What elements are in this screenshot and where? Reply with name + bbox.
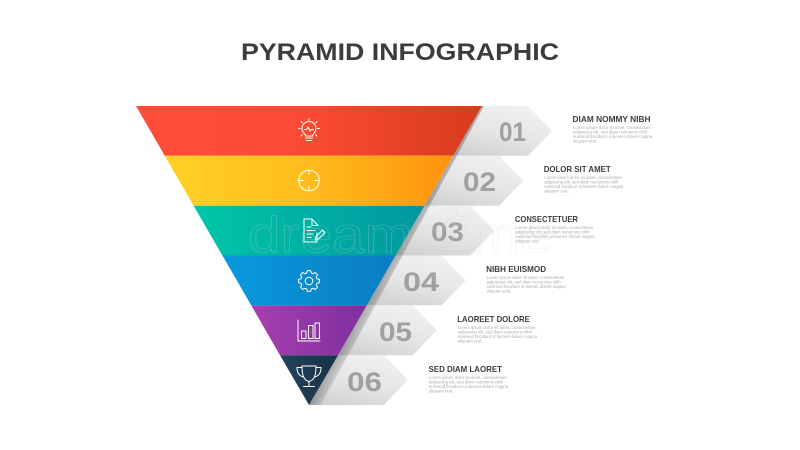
body 01: euismod tincidunt ut laoreet dolore magna bbox=[573, 134, 653, 139]
arrow 06 bbox=[309, 355, 408, 405]
icon: gear bbox=[299, 271, 319, 291]
body 03: aliquam erat. bbox=[515, 239, 540, 244]
arrow 03 bbox=[396, 206, 494, 256]
body 01: aliquam erat. bbox=[573, 139, 598, 144]
label 02 bbox=[544, 164, 624, 194]
label 03 bbox=[515, 214, 595, 244]
body 04: aliquam erat. bbox=[487, 289, 511, 294]
body 06: euismod tincidunt ut laoreet dolore magna bbox=[429, 384, 509, 389]
pyramid edge shadow bbox=[309, 106, 484, 405]
band 5 purple bbox=[251, 305, 367, 355]
icon: bar chart bbox=[298, 320, 320, 341]
arrow 04 bbox=[367, 256, 466, 305]
arrow 05: 05 bbox=[379, 317, 412, 347]
body 06: adipiscing elit, sed diam nonummy nibh bbox=[429, 380, 504, 384]
heading 04: NIBH EUISMOD bbox=[486, 264, 546, 274]
body 02: adipiscing elit, sed diam nonummy nibh bbox=[544, 180, 619, 184]
arrow 01: 01 bbox=[499, 117, 526, 147]
arrow tabs with numbers bbox=[309, 106, 552, 405]
arrow 02: 02 bbox=[463, 167, 496, 197]
band 6 navy bbox=[280, 355, 338, 405]
heading 02: DOLOR SIT AMET bbox=[544, 164, 612, 174]
arrow 01 bbox=[453, 106, 552, 156]
label 06 bbox=[428, 364, 509, 394]
label 05 bbox=[457, 314, 538, 344]
body 03: Lorem ipsum dolor sit amet, consectetuer bbox=[515, 225, 594, 230]
body 05: Lorem ipsum dolor sit amet, consectetuer bbox=[458, 325, 536, 330]
band 1 red bbox=[136, 106, 482, 156]
title: PYRAMID INFOGRAPHIC bbox=[241, 39, 559, 66]
heading 05: LAOREET DOLORE bbox=[457, 314, 530, 324]
body 04: euismod tincidunt ut laoreet dolore magna bbox=[487, 284, 566, 289]
arrow 03: 03 bbox=[431, 217, 464, 247]
icon: document with pencil bbox=[304, 219, 325, 242]
body 04: adipiscing elit, sed diam nonummy nibh bbox=[487, 280, 561, 284]
arrow 05 bbox=[338, 305, 437, 355]
body 03: adipiscing elit, sed diam nonummy nibh bbox=[515, 230, 590, 234]
body 02: aliquam erat. bbox=[544, 189, 569, 194]
body 06: Lorem ipsum dolor sit amet, consectetuer bbox=[429, 375, 508, 380]
band 3 teal bbox=[194, 206, 424, 256]
heading 06: SED DIAM LAORET bbox=[428, 364, 503, 374]
label 04 bbox=[486, 264, 566, 294]
body 05: aliquam erat. bbox=[458, 339, 482, 344]
body 04: Lorem ipsum dolor sit amet, consectetuer bbox=[487, 275, 565, 280]
arrow 02 bbox=[424, 156, 523, 206]
icon: target bbox=[299, 170, 319, 191]
body 02: Lorem ipsum dolor sit amet, consectetuer bbox=[544, 175, 623, 180]
band 2 yellow bbox=[165, 156, 453, 206]
body 01: adipiscing elit, sed diam nonummy nibh bbox=[573, 130, 648, 134]
body 05: adipiscing elit, sed diam nonummy nibh bbox=[458, 330, 533, 334]
arrow 06: 06 bbox=[347, 367, 382, 397]
body 03: euismod tincidunt ut laoreet dolore magna bbox=[515, 234, 595, 239]
inverted pyramid bbox=[136, 106, 482, 405]
icon: light bulb bbox=[298, 118, 320, 140]
arrow 04: 04 bbox=[403, 267, 439, 297]
heading 03: CONSECTETUER bbox=[515, 214, 578, 224]
body 05: euismod tincidunt ut laoreet dolore magna bbox=[458, 334, 538, 339]
band 4 blue bbox=[222, 256, 396, 305]
label 01 bbox=[572, 114, 653, 144]
watermark: dreamstime bbox=[248, 207, 552, 263]
body 01: Lorem ipsum dolor sit amet, consectetuer bbox=[573, 125, 652, 130]
heading 01: DIAM NOMMY NIBH bbox=[572, 114, 650, 124]
body 06: aliquam erat. bbox=[429, 389, 454, 394]
body 02: euismod tincidunt ut laoreet dolore magna bbox=[544, 184, 624, 189]
icon: trophy bbox=[297, 366, 321, 386]
